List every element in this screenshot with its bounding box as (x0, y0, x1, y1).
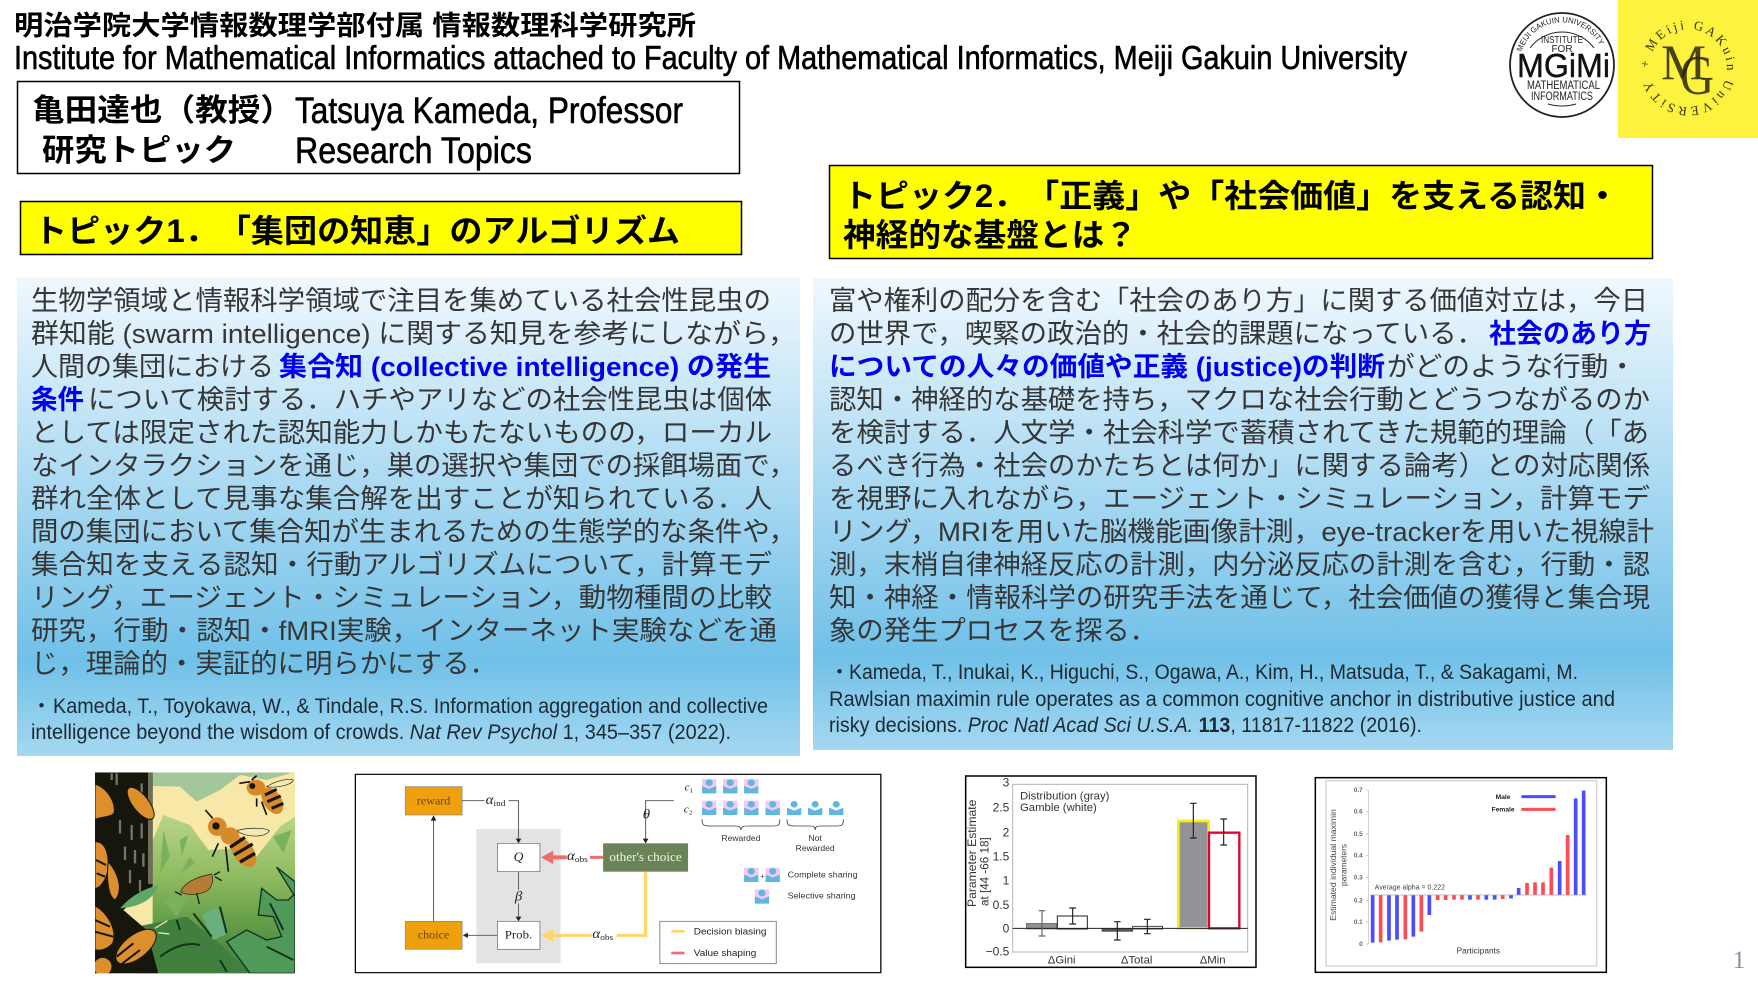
citation: topic 2 reference: risky decisions. Proc Natl Acad Sci U.S.A. 113, 11817-11822 (2016). (829, 714, 1422, 737)
y axis title: Estimated individual maximin (1328, 809, 1338, 921)
text block: topic 1 body: 生物学領域と情報科学領域で注目を集めている社会性昆虫の (31, 286, 771, 316)
panel: topic 2 description (813, 278, 1673, 750)
people icons (702, 779, 843, 904)
heading: topic 2: トピック2．「正義」や「社会価値」を支える認知・ (843, 178, 1619, 214)
text block: topic 2 body: 認知・神経的な基礎を持ち，マクロな社会行動とどうつながるのか (829, 385, 1650, 415)
arrow: decision biasing (541, 872, 646, 942)
text block: topic 2 body: 測，末梢自律神経反応の計測，内分泌反応の計測を含む，行動・認 (829, 550, 1650, 580)
y axis ticks: 0 (1003, 921, 1010, 935)
text block: topic 1 body: 研究，行動・認知・fMRI実験，インターネット実験などを通 (31, 616, 777, 646)
math labels: θ (643, 807, 650, 823)
text block: topic 1 body: 条件 (31, 385, 84, 415)
y axis title: parameters (1339, 844, 1349, 886)
arrow: value shaping (541, 851, 603, 864)
logo: MGiMi institute seal: INSTITUTE (1541, 35, 1583, 46)
text block: topic 1 body: リング，エージェント・シミュレーション，動物種間の比較 (31, 583, 772, 613)
node: reward (405, 787, 462, 815)
box: professor name and research topics: Tatsuya Kameda, Professor (295, 90, 683, 131)
logo: Meiji Gakuin yellow emblem: + MEiji GAKuin UniVERSiTY (1642, 20, 1734, 116)
legend (1492, 794, 1554, 814)
legend (660, 921, 776, 964)
arrows (434, 801, 674, 935)
logo: MGiMi institute seal: MATHEMATICAL (1527, 80, 1600, 92)
text block: topic 2 body: 社会のあり方 (1489, 319, 1651, 349)
text block: topic 2 body: 象の発生プロセスを探る． (829, 616, 1157, 646)
citation: topic 1 reference (31, 695, 768, 744)
braces and group labels: Rewarded (721, 834, 761, 843)
logo: Meiji Gakuin yellow emblem: G (1680, 45, 1714, 107)
citation: topic 1 reference: Kameda, T., Toyokawa, W., & Tindale, R.S. Information aggregation and collective (53, 695, 768, 718)
y axis ticks: 1.5 (993, 849, 1010, 863)
text block: topic 2 body (829, 286, 1654, 646)
figure: individual maximin parameters bar chart (1315, 778, 1606, 972)
flying bee: centre (205, 810, 269, 872)
x axis title: Participants (1457, 945, 1500, 955)
text block: topic 1 body: について検討する．ハチやアリなどの社会性昆虫は個体 (88, 385, 772, 415)
text block: topic 2 body: の世界で，喫緊の政治的・社会的課題になっている． (829, 319, 1484, 349)
y axis title (1328, 809, 1349, 921)
math labels: 2 (689, 810, 693, 817)
y axis ticks: 2 (1003, 826, 1010, 840)
text block: topic 1 body: 群知能 (swarm intelligence) に関する知見を参考にしながら， (31, 319, 796, 349)
text block: topic 1 body: 群れ全体として見事な集合解を出すことが知られている．人 (31, 484, 772, 514)
box: professor name and research topics: 亀田達也（教授） (32, 93, 293, 128)
y axis ticks: 2.5 (993, 800, 1010, 814)
math labels: 1 (690, 788, 694, 795)
node: other's choice: other's choice (609, 850, 682, 864)
y axis title (966, 800, 991, 907)
figure: social learning model diagram (355, 774, 881, 973)
node: other's choice (603, 843, 688, 872)
y axis ticks: −0.5 (986, 945, 1010, 959)
node: choice (405, 921, 462, 949)
y axis ticks: 3 (1003, 776, 1010, 790)
y axis: 0 (1359, 941, 1363, 948)
text block: topic 2 body: リング，MRIを用いた脳機能画像計測，eye-trackerを用いた視線計 (829, 517, 1654, 547)
y axis title: Parameter Estimate (966, 800, 979, 907)
text block: topic 1 body: 人間の集団における (31, 352, 274, 382)
panel: topic 1 description (17, 277, 800, 756)
logo: MGiMi institute seal: MGiMi (1517, 47, 1610, 84)
heading: topic 1: トピック1．「集団の知恵」のアルゴリズム (34, 213, 680, 249)
y axis: 0.3 (1354, 875, 1363, 882)
y axis: 0.4 (1354, 853, 1363, 860)
node: Prob: Prob. (505, 928, 532, 942)
logo: MGiMi institute seal: FOR (1551, 44, 1573, 55)
text block: topic 2 body: を視野に入れながら，エージェント・シミュレーション，計算モデ (829, 484, 1650, 514)
y axis: 0.1 (1354, 919, 1363, 926)
y axis: 0.5 (1354, 831, 1363, 838)
node: Q: Q (514, 849, 524, 864)
text block: topic 1 body: なインタラクションを通じ，巣の選択や集団での採餌場面で， (31, 451, 796, 481)
y axis (1354, 787, 1363, 948)
text block: topic 2 body: るべき行為・社会のかたちとは何か」に関する論考）との対応関係 (829, 451, 1650, 481)
legend note: Gamble (white) (1020, 802, 1097, 814)
y axis: 0.2 (1354, 897, 1363, 904)
math labels: obs (600, 932, 614, 942)
bars: blue male, red female (1373, 791, 1584, 943)
x axis labels: ΔGini (1048, 955, 1076, 967)
node: reward: reward (417, 795, 451, 807)
text block: topic 2 body: を検討する．人文学・社会科学で蓄積されてきた規範的理論（「あ (829, 418, 1649, 448)
math labels (486, 782, 694, 942)
logo: MGiMi institute seal: INFORMATICS (1531, 91, 1593, 103)
citation: topic 1 reference: ・ (31, 695, 52, 718)
y axis: 0.6 (1354, 809, 1363, 816)
text block: topic 2 body: 知・神経・情報科学の研究手法を通じて，社会価値の獲得と集合現 (829, 583, 1650, 613)
y axis: 0.7 (1354, 787, 1363, 794)
y axis title: at [44 -66 18] (978, 837, 991, 906)
logo: MGiMi institute seal (1509, 12, 1615, 118)
math labels: β (514, 889, 523, 905)
heading: topic 1 (20, 202, 742, 254)
legend: Female (1492, 807, 1515, 814)
figure: parameter estimate bar chart (966, 776, 1256, 967)
text block: topic 2 body: についての人々の価値や正義 (justice)の判断 (829, 352, 1385, 382)
heading: topic 2: 神経的な基盤とは？ (843, 217, 1137, 253)
math labels: α (486, 792, 494, 808)
y axis ticks (986, 776, 1010, 959)
text block: topic 2 body: がどのような行動・ (1387, 352, 1636, 382)
node: Prob (497, 921, 540, 949)
logo: Meiji Gakuin yellow emblem: M (1661, 34, 1706, 90)
text block: topic 1 body: 間の集団において集合知が生まれるための生態学的な条件や， (31, 517, 796, 547)
box: professor name and research topics (18, 82, 740, 174)
plot frame (1013, 784, 1248, 952)
illustration: honeybees around a tree trunk (93, 772, 295, 976)
x axis labels: ΔTotal (1121, 955, 1152, 967)
math labels: c (685, 782, 690, 794)
y axis ticks: 1 (1003, 873, 1010, 887)
node: choice: choice (418, 929, 449, 942)
box: professor name and research topics: 研究トピック (42, 133, 236, 168)
error bars (1039, 803, 1227, 940)
logo: Meiji Gakuin yellow emblem (1618, 0, 1758, 138)
citation: topic 2 reference (829, 661, 1615, 737)
legend: Male (1496, 794, 1511, 801)
people icons: + (760, 872, 765, 881)
math labels: α (567, 848, 575, 864)
citation: topic 2 reference: ・ (829, 661, 850, 684)
x axis labels: ΔMin (1200, 955, 1226, 967)
braces and group labels: Rewarded (796, 844, 835, 853)
foreground leaves (227, 867, 295, 973)
text block: topic 1 body: 集合知 (collective intelligence) の発生 (279, 352, 771, 382)
node: Q (497, 843, 540, 872)
y axis ticks: 0.5 (993, 898, 1010, 912)
title: institute name in Japanese: 明治学院大学情報数理学部付属 情報数理科学研究所 (14, 11, 696, 41)
legend: Value shaping (694, 948, 756, 959)
citation: topic 2 reference: Kameda, T., Inukai, K., Higuchi, S., Ogawa, A., Kim, H., Matsuda, T., & Sakagami, M. (849, 661, 1578, 684)
math labels: ind (494, 798, 506, 808)
legend note: Distribution (gray) (1020, 790, 1110, 802)
math labels: obs (575, 854, 588, 864)
text block: topic 1 body: じ，理論的・実証的に明らかにする． (31, 649, 497, 679)
text block: topic 2 body: 富や権利の配分を含む「社会のあり方」に関する価値対立は，今日 (829, 286, 1648, 316)
braces and group labels: Selective sharing (788, 891, 856, 901)
citation: topic 2 reference: Rawlsian maximin rule operates as a common cognitive anchor in distributive justice and (829, 688, 1615, 711)
grey group behind Q and Prob (476, 829, 561, 963)
text block: topic 1 body: としては限定された認知能力しかもたないものの，ローカル (31, 418, 772, 448)
flying bee: small brown (175, 872, 222, 904)
page number: 1 (1733, 947, 1745, 974)
average label: Average alpha = 0.222 (1375, 884, 1445, 891)
bees on trunk (93, 783, 162, 976)
legend: Decision biasing (694, 927, 766, 937)
braces and group labels: Complete sharing (788, 870, 858, 879)
braces and group labels: Not (809, 834, 823, 843)
math labels: α (592, 926, 600, 942)
legend note (1020, 790, 1110, 814)
heading: topic 2 (830, 166, 1652, 258)
math labels: c (684, 804, 689, 816)
bars (1013, 821, 1248, 931)
title: institute name in English: Institute for Mathematical Informatics attached to Faculty of Mathematical Informatics, Meiji Gakuin University (14, 39, 1407, 76)
text block: topic 1 body (31, 286, 796, 679)
box: professor name and research topics: Research Topics (295, 130, 532, 171)
flying bee: upper (239, 776, 293, 818)
x axis labels (1048, 955, 1226, 967)
text block: topic 1 body: 集合知を支える認知・行動アルゴリズムについて，計算モデ (31, 550, 772, 580)
braces and group labels (702, 819, 858, 901)
logo: MGiMi institute seal: MEIJI GAKUIN UNIVERSITY (1516, 16, 1604, 52)
citation: topic 1 reference: intelligence beyond the wisdom of crowds. Nat Rev Psychol 1, 345–357 (2022). (31, 721, 731, 744)
